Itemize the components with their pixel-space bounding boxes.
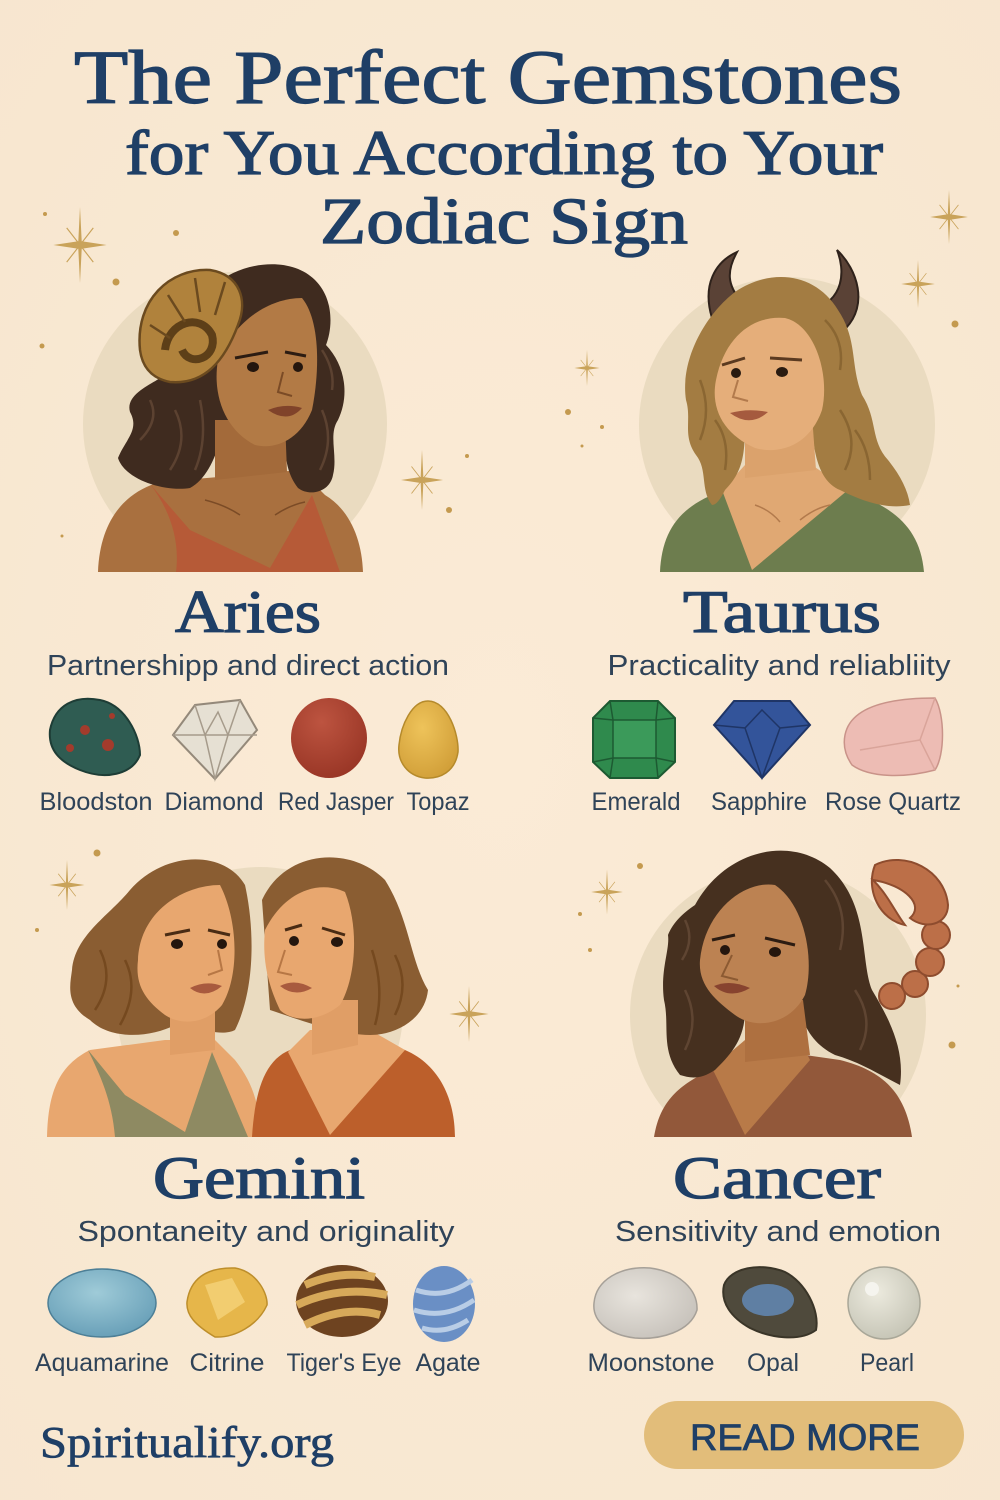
labels: Gemini gems — [35, 1349, 480, 1377]
heading: Cancer: Cancer — [673, 1145, 881, 1211]
portrait: Cancer — [630, 851, 950, 1163]
gem: Aquamarine — [48, 1269, 156, 1337]
gems: Gemini — [48, 1265, 475, 1342]
portrait: Gemini — [47, 857, 455, 1153]
labels: Taurus gems — [592, 788, 961, 816]
labels: Taurus gems: Emerald — [592, 788, 680, 816]
title: for You According to Your — [125, 117, 883, 188]
labels: Cancer gems: Moonstone — [588, 1349, 714, 1377]
title: Zodiac Sign — [320, 185, 688, 258]
labels: Aries gems — [40, 788, 470, 816]
gem: Tiger's Eye — [296, 1265, 388, 1337]
text: Taurus trait: Practicality and reliabliity — [608, 650, 951, 682]
labels: Aries gems: Red Jasper — [278, 788, 394, 816]
title: The Perfect Gemstones — [74, 36, 902, 120]
gem: Topaz — [399, 701, 458, 778]
button: READ MORE: READ MORE — [690, 1417, 920, 1458]
gem: Diamond — [173, 700, 257, 779]
labels: Taurus gems: Sapphire — [711, 788, 807, 816]
labels: Gemini gems: Tiger's Eye — [286, 1349, 402, 1377]
button: READ MORE — [644, 1401, 964, 1469]
labels: Aries gems: Diamond — [164, 788, 264, 816]
decorative stars and dots — [35, 190, 968, 1048]
portrait: Taurus — [639, 250, 935, 573]
gem: Agate — [413, 1266, 475, 1342]
labels: Cancer gems — [588, 1349, 914, 1377]
gem: Opal — [723, 1267, 817, 1337]
brand: Spiritualify.org: Spiritualify.org — [40, 1418, 334, 1467]
gem: Bloodstone — [50, 699, 140, 775]
labels: Cancer gems: Opal — [747, 1349, 799, 1377]
labels: Cancer gems: Pearl — [860, 1349, 914, 1377]
gem: Sapphire — [714, 701, 810, 778]
text: Gemini trait: Spontaneity and originality — [78, 1216, 455, 1248]
labels: Gemini gems: Agate — [416, 1349, 480, 1377]
heading: Gemini: Gemini — [153, 1145, 365, 1211]
portrait: Aries — [83, 264, 387, 576]
labels: Aries gems: Bloodston — [40, 788, 152, 816]
labels: Aries gems: Topaz — [406, 788, 470, 816]
labels: Gemini gems: Aquamarine — [35, 1349, 169, 1377]
heading: Taurus: Taurus — [683, 579, 881, 645]
gems: Aries — [50, 698, 458, 779]
gem: Rose Quartz — [844, 698, 942, 775]
gem: Moonstone — [594, 1268, 697, 1338]
gem: Emerald — [593, 701, 675, 778]
gem: Pearl — [848, 1267, 920, 1339]
gems: Taurus — [593, 698, 942, 778]
labels: Gemini gems: Citrine — [190, 1349, 264, 1377]
gem: Red Jasper — [291, 698, 367, 778]
text: Aries trait: Partnershipp and direct action — [47, 650, 449, 682]
text: Cancer trait: Sensitivity and emotion — [615, 1216, 941, 1248]
gem: Citrine — [187, 1268, 267, 1337]
title — [74, 36, 902, 258]
heading: Aries: Aries — [175, 579, 321, 645]
labels: Taurus gems: Rose Quartz — [825, 788, 961, 816]
gems: Cancer — [594, 1267, 920, 1339]
